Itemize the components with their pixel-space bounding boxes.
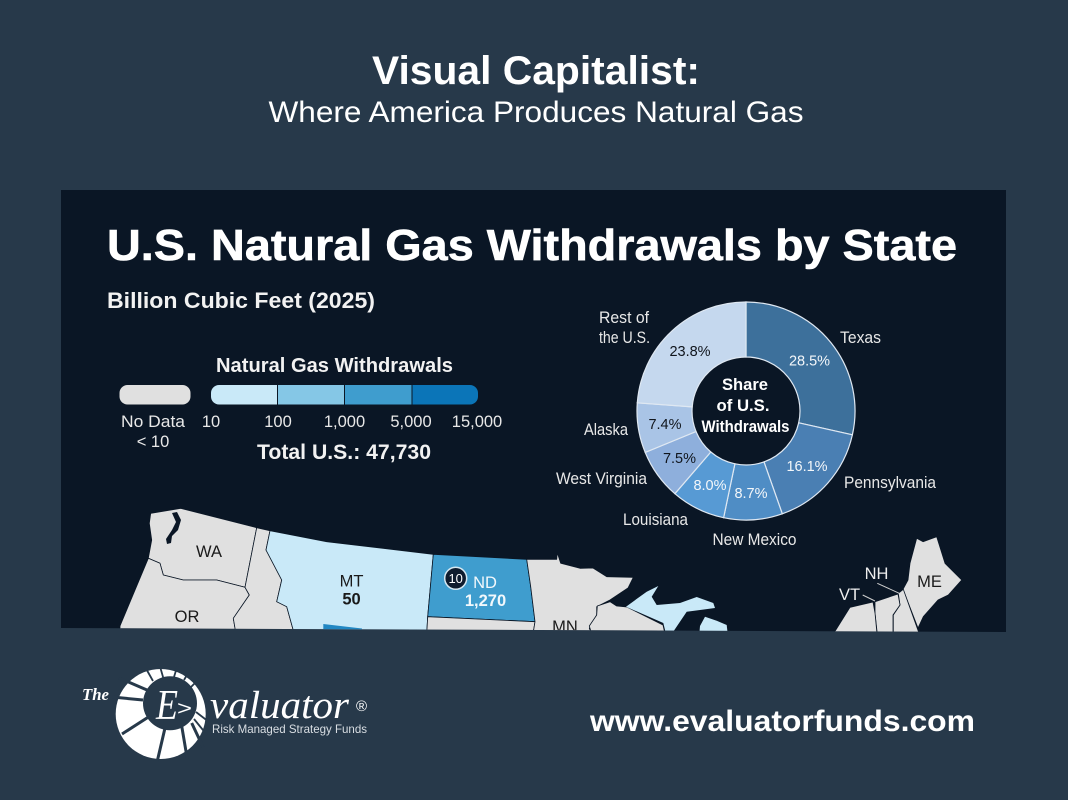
legend: no data swatch (120, 385, 190, 404)
donut state labels: the U.S. (599, 328, 650, 347)
state: NY (835, 602, 878, 632)
state labels: OR (175, 608, 199, 626)
state labels: WA (196, 543, 222, 561)
legend labels: 10 (202, 413, 220, 431)
donut state labels: Rest of (599, 308, 649, 327)
puget sound (166, 512, 181, 544)
state labels (175, 543, 942, 636)
logo wordmark: ® (356, 698, 367, 715)
donut centre label (702, 375, 790, 436)
slice: Alaska (637, 403, 696, 452)
logo wordmark: The (82, 685, 109, 704)
state labels: 1,270 (465, 592, 506, 610)
panel: infographic (61, 190, 1006, 636)
donut percentages: 7.5% (663, 451, 696, 467)
state: WA (148, 508, 257, 587)
state: ND (428, 554, 535, 622)
legend labels: 1,000 (324, 413, 365, 431)
state: ID (233, 528, 294, 634)
slice: Pennsylvania (764, 423, 852, 514)
state: ME (903, 537, 962, 628)
donut state labels: Alaska (584, 420, 628, 439)
donut centre label: of U.S. (716, 396, 770, 415)
donut chart (556, 302, 936, 549)
state: OR (120, 558, 249, 634)
chart title: U.S. Natural Gas Withdrawals by State (107, 221, 957, 270)
state: SD (426, 616, 534, 630)
donut state labels: New Mexico (712, 530, 796, 549)
header subtitle: Where America Produces Natural Gas (268, 96, 804, 129)
donut state labels (556, 308, 936, 549)
state labels: ME (917, 573, 942, 591)
rank badge (445, 567, 467, 589)
donut state labels: Louisiana (623, 510, 688, 529)
legend: colour scale (211, 385, 478, 404)
website url: www.evaluatorfunds.com (589, 705, 975, 738)
state labels: NH (865, 565, 888, 583)
state: MT (266, 531, 433, 634)
slice: Texas (746, 302, 855, 435)
logo wordmark: E (155, 683, 178, 729)
donut percentages: 8.7% (734, 486, 768, 502)
donut state labels: West Virginia (556, 469, 647, 488)
leader lines (863, 583, 899, 601)
donut percentages: 23.8% (669, 344, 711, 360)
legend labels (121, 413, 502, 451)
total: Total U.S.: 47,730 (257, 441, 431, 464)
state: WI (588, 602, 664, 630)
donut percentages: 8.0% (693, 478, 727, 494)
state labels: 50 (342, 590, 361, 608)
state: MI lower peninsula (700, 616, 728, 631)
logo: The Evaluator (82, 664, 367, 761)
state labels: ND (473, 574, 497, 592)
logo wordmark: Risk Managed Strategy Funds (212, 722, 367, 736)
header title: Visual Capitalist: (372, 49, 700, 93)
legend labels: < 10 (137, 433, 169, 451)
logo ring (112, 664, 209, 761)
donut percentages: 28.5% (789, 354, 830, 370)
donut percentages (648, 344, 830, 502)
state: VT (875, 594, 900, 634)
state labels: MN (552, 618, 578, 636)
logo wordmark (82, 683, 367, 736)
state: WY (323, 624, 362, 630)
state: MN (527, 553, 633, 634)
legend (120, 355, 502, 464)
slice: New Mexico (724, 462, 782, 520)
legend labels: 15,000 (452, 413, 502, 431)
donut percentages: 7.4% (648, 417, 682, 433)
legend title: Natural Gas Withdrawals (216, 355, 453, 377)
legend labels: 100 (264, 413, 292, 431)
map of states (120, 508, 962, 636)
state: NH (893, 589, 919, 634)
state labels: MT (340, 572, 363, 590)
chart subtitle: Billion Cubic Feet (2025) (107, 288, 375, 313)
logo wordmark: > (177, 698, 192, 720)
page header (268, 49, 804, 129)
slice: Louisiana (675, 452, 735, 518)
donut state labels: Pennsylvania (844, 473, 936, 492)
legend labels: 5,000 (390, 413, 432, 431)
donut percentages: 16.1% (786, 459, 828, 475)
donut centre label: Withdrawals (702, 417, 790, 436)
legend labels: No Data (121, 413, 186, 431)
logo wordmark: valuator (210, 684, 350, 727)
state: MI upper peninsula (626, 586, 715, 634)
state labels: VT (839, 586, 860, 604)
rank badge: 10 (448, 571, 463, 586)
donut state labels: Texas (840, 328, 881, 347)
slice: Rest of the U.S. (637, 302, 746, 407)
donut centre label: Share (722, 375, 768, 394)
slice: West Virginia (645, 432, 711, 494)
